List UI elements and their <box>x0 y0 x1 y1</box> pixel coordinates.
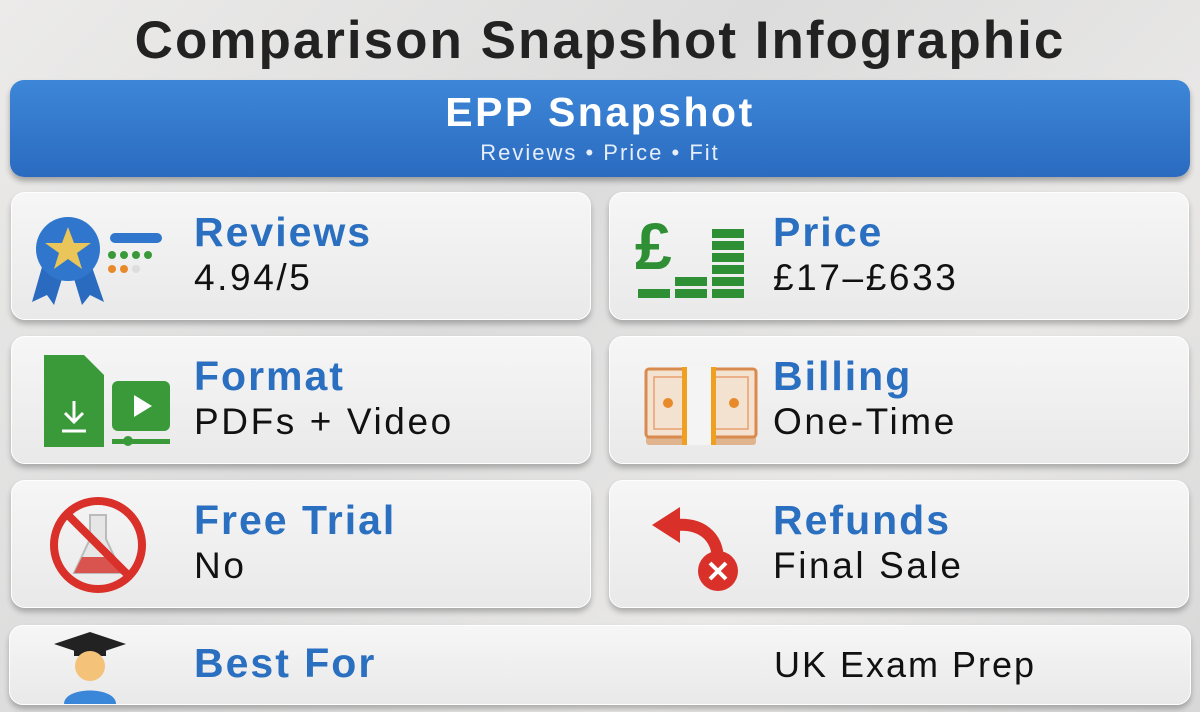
icon: return arrow with x <box>652 507 738 591</box>
heading: Format <box>194 353 345 399</box>
panel: reviews <box>11 192 591 320</box>
value: PDFs + Video <box>194 401 454 442</box>
panel: billing <box>609 336 1189 464</box>
heading: Refunds <box>773 497 951 543</box>
icon: pound coins <box>635 209 744 298</box>
icon: banknote stack <box>644 367 758 445</box>
icon: pound coins: £ <box>635 209 672 283</box>
icon: award ribbon <box>32 217 162 305</box>
value: One-Time <box>773 401 957 442</box>
panel: best for <box>9 625 1191 705</box>
banner <box>10 80 1190 177</box>
panel: price <box>609 192 1189 320</box>
icon: pdf and video <box>44 355 170 447</box>
value: No <box>194 545 246 586</box>
value: UK Exam Prep <box>774 644 1036 685</box>
panel: format <box>11 336 591 464</box>
panel: free trial <box>11 480 591 608</box>
icon: no flask <box>50 497 146 593</box>
panel: refunds <box>609 480 1189 608</box>
banner title: EPP Snapshot <box>445 89 755 135</box>
heading: Free Trial <box>194 497 396 543</box>
value: 4.94/5 <box>194 257 312 298</box>
heading: Price <box>773 209 883 255</box>
heading: Reviews <box>194 209 372 255</box>
title: Comparison Snapshot Infographic <box>135 11 1065 70</box>
heading: Best For <box>194 640 376 686</box>
value: Final Sale <box>773 545 964 586</box>
heading: Billing <box>773 353 912 399</box>
icon: graduate <box>54 632 126 704</box>
banner subtitle: Reviews • Price • Fit <box>480 140 720 165</box>
value: £17–£633 <box>773 257 958 298</box>
